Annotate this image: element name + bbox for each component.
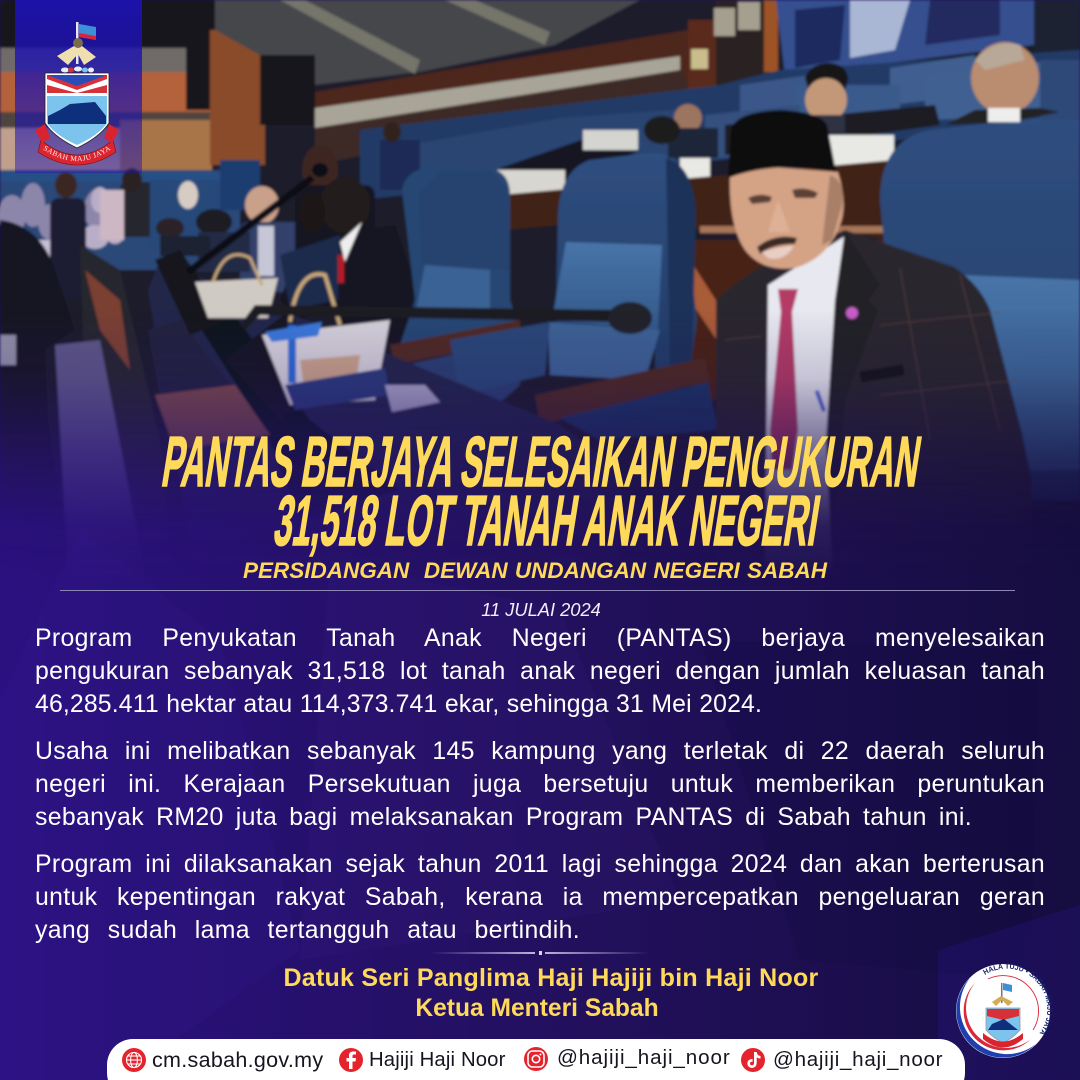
lower background facets: [0, 530, 1080, 1080]
gift bags: [195, 278, 278, 318]
icon: facebook: [339, 1048, 363, 1072]
icon: instagram: [524, 1047, 548, 1071]
icon: website globe: [122, 1048, 146, 1072]
main figure: face and songkok: [730, 165, 844, 269]
contact bar: [107, 1039, 965, 1080]
blue chair behind ministers: [400, 168, 520, 345]
desks with name plates: [725, 105, 940, 155]
paragraph 3: Program ini dilaksanakan sejak tahun 2011 lagi sehingga 2024 dan akan berterusan: [35, 851, 1045, 878]
paragraph 2: negeri ini. Kerajaan Persekutuan juga bersetuju untuk memberikan peruntukan: [35, 771, 1045, 798]
signatory role: Ketua Menteri Sabah: [415, 995, 659, 1022]
paragraph 2: Usaha ini melibatkan sebanyak 145 kampung yang terletak di 22 daerah seluruh: [35, 738, 1045, 765]
left wall and wood panels: [0, 0, 220, 48]
badge: Hala Tuju Sabah Maju Jaya: HALA TUJU • SABAH MAJU JAYA: [982, 964, 1052, 1034]
giant screen: [776, 0, 1034, 76]
paragraph 2: [35, 738, 1045, 831]
microphones: [240, 305, 620, 330]
fade overlay from photo into purple: [0, 324, 1080, 1080]
paragraph 1: [35, 625, 1045, 718]
date: 11 JULAI 2024: [481, 599, 601, 620]
minister group at desks: [245, 186, 279, 224]
blue crescent: [956, 978, 1036, 1058]
paragraph 3: untuk kepentingan rakyat Sabah, kerana ia mempercepatkan pengeluaran geran: [35, 884, 1045, 911]
icon: flag and pole: [76, 22, 96, 64]
paragraph 3: [35, 851, 1045, 944]
paragraph 2: sebanyak RM20 juta bagi melaksanakan Program PANTAS di Sabah tahun ini.: [35, 804, 972, 831]
desk top with monitors: [148, 260, 620, 600]
icon: hands gripping pole: [57, 46, 96, 65]
signatory name: Datuk Seri Panglima Haji Hajiji bin Haji Noor: [284, 964, 818, 992]
distant seating rows: [360, 50, 1080, 200]
icon: motto ribbon: [35, 124, 119, 166]
main figure: suit: [716, 230, 1032, 570]
right large blue chair: [880, 113, 1080, 500]
foreground figure at left: [0, 220, 75, 640]
paragraph 3: yang sudah lama tertangguh atau bertindih.: [35, 917, 580, 944]
standing aide: [55, 172, 77, 198]
far crowd and aisle: [0, 170, 240, 270]
back-row members: [805, 63, 848, 90]
divider under subtitle: [60, 590, 1015, 591]
contact: instagram: @hajiji_haji_noor: [557, 1046, 731, 1069]
paragraph 1: 46,285.411 hektar atau 114,373.741 ekar, sehingga 31 Mei 2024.: [35, 691, 762, 718]
paragraph 1: pengukuran sebanyak 31,518 lot tanah anak negeri dengan jumlah keluasan tanah: [35, 658, 1045, 685]
contact: facebook: Hajiji Haji Noor: [369, 1049, 506, 1071]
icon: tiktok: [741, 1048, 765, 1072]
icon: motto ribbon: SABAH MAJU JAYA: [43, 146, 111, 162]
hall wall base: [0, 0, 1080, 600]
subtitle: PERSIDANGAN DEWAN UNDANGAN NEGERI SABAH: [243, 558, 827, 583]
contact: tiktok: @hajiji_haji_noor: [773, 1048, 943, 1071]
red crescent: [964, 983, 1031, 1050]
paragraph 1: Program Penyukatan Tanah Anak Negeri (PANTAS) berjaya menyelesaikan: [35, 625, 1045, 652]
centre blue chair: [555, 153, 697, 380]
contact: website: cm.sabah.gov.my: [152, 1048, 323, 1072]
icon: shield: [45, 73, 109, 148]
